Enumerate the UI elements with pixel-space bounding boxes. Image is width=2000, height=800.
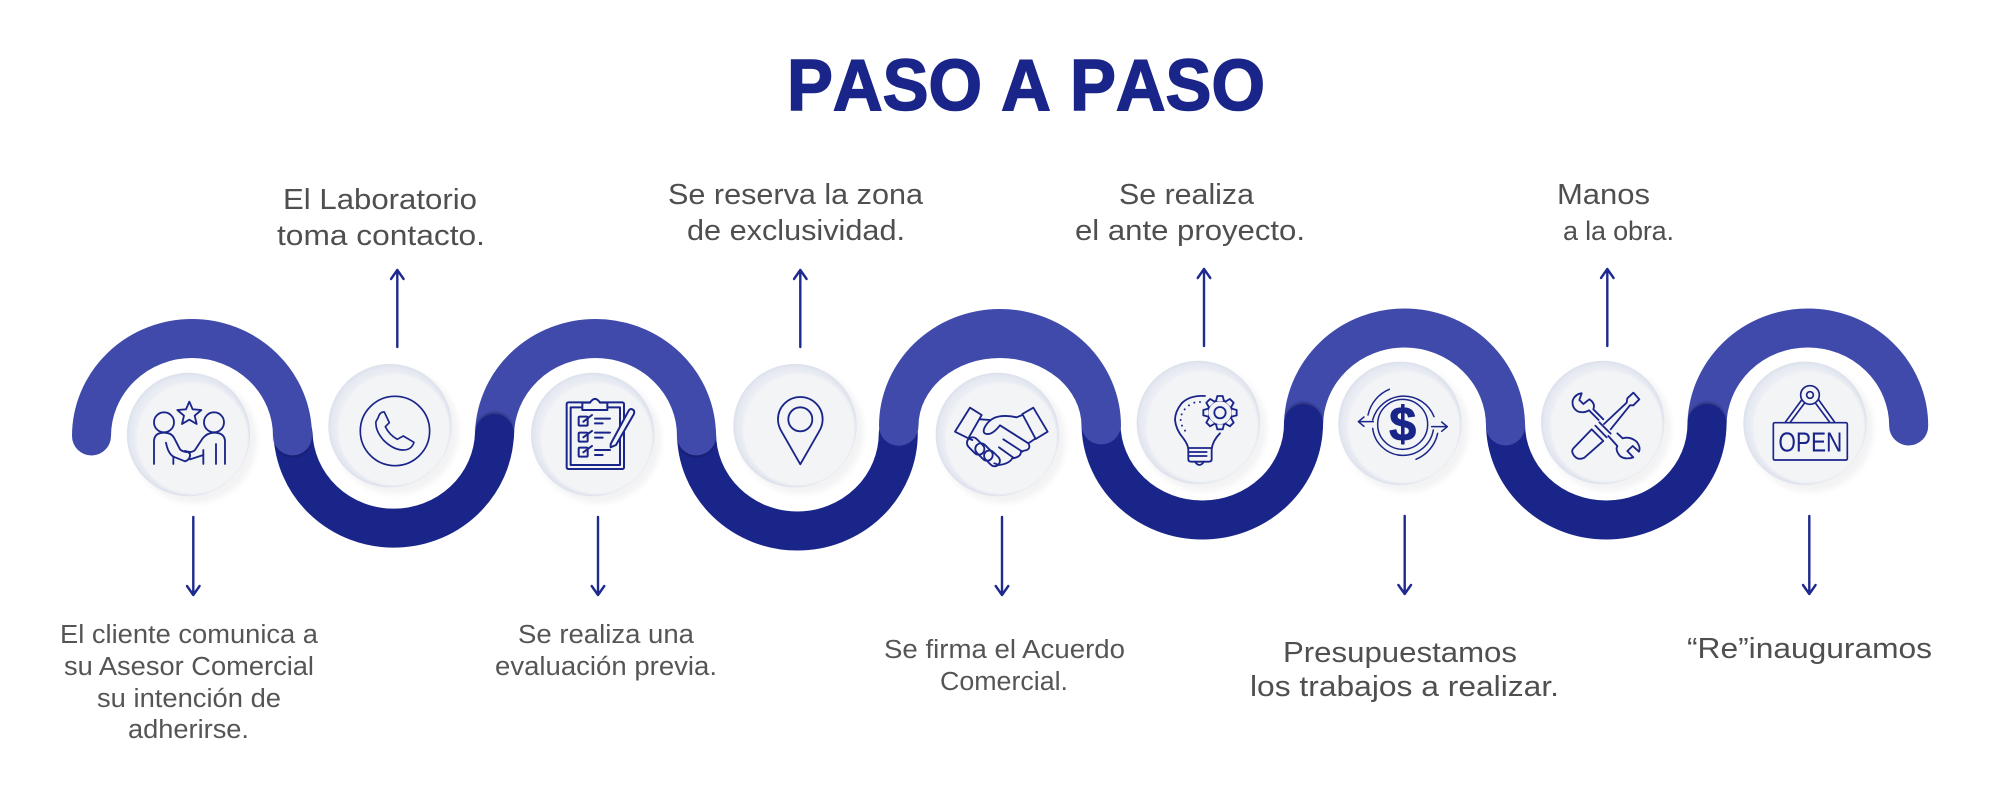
- step 6 button: [1137, 361, 1266, 491]
- text: step 8: [1557, 179, 1674, 246]
- icon: clipboard checklist: [567, 399, 634, 469]
- text: step 8: a la obra.: [1563, 216, 1674, 246]
- text: step 1: El cliente comunica a: [60, 621, 319, 649]
- text: step 4: [668, 179, 924, 247]
- text: step 1: su intención de: [97, 685, 281, 713]
- step 7 button: [1338, 362, 1468, 492]
- text: step 2: toma contacto.: [277, 220, 485, 252]
- text: step 6: [1075, 179, 1305, 247]
- text: step 6: el ante proyecto.: [1075, 215, 1305, 247]
- title: PASO A PASO: [787, 46, 1265, 126]
- text: step 1: [60, 621, 319, 744]
- icon: wrench and screwdriver: [1572, 393, 1640, 459]
- text: step 7: los trabajos a realizar.: [1250, 671, 1559, 703]
- step 2 button: [328, 364, 458, 494]
- text: step 1: adherirse.: [128, 716, 249, 744]
- arrow: step 3 down: [592, 517, 604, 595]
- text: step 7: Presupuestamos: [1283, 637, 1517, 669]
- step 8 button: [1541, 361, 1671, 491]
- icon: phone: [360, 396, 430, 466]
- arrow: step 5 down: [996, 517, 1008, 595]
- text: step 1: su Asesor Comercial: [64, 653, 314, 681]
- arrow: step 8 up: [1601, 269, 1614, 346]
- text: step 5: Comercial.: [940, 668, 1068, 696]
- text: step 2: [277, 184, 485, 252]
- step 9 button: [1743, 362, 1874, 492]
- icon: light bulb with gear: [1175, 396, 1237, 465]
- arrow: step 1 down: [187, 517, 200, 595]
- arrow: step 7 down: [1398, 516, 1411, 594]
- text: step 3: evaluación previa.: [495, 653, 717, 681]
- step 1 button: [127, 373, 257, 503]
- icon: handshake: [955, 408, 1048, 468]
- arrow: step 9 down: [1803, 516, 1816, 594]
- arrow: step 2 up: [391, 270, 404, 347]
- text: step 3: Se realiza una: [518, 621, 695, 649]
- text: step 3: [495, 621, 717, 681]
- arrow: step 6 up: [1198, 269, 1210, 346]
- text: step 2: El Laboratorio: [283, 184, 477, 216]
- arrow: step 4 up: [794, 270, 807, 347]
- text: step 4: de exclusividad.: [687, 215, 905, 247]
- text: step 4: Se reserva la zona: [668, 179, 924, 211]
- step 3 button: [531, 373, 661, 503]
- text: step 5: [884, 636, 1125, 696]
- text: step 8: Manos: [1557, 179, 1650, 211]
- text: step 6: Se realiza: [1119, 179, 1255, 211]
- text: step 5: Se firma el Acuerdo: [884, 636, 1125, 664]
- icon: people handshake with star: [154, 402, 225, 464]
- step 5 button: [936, 373, 1066, 503]
- wave path: [92, 309, 1909, 531]
- text: step 9: “Re”inauguramos: [1687, 633, 1932, 665]
- icon: location pin: [778, 397, 823, 464]
- icon: open sign: OPEN: [1778, 427, 1842, 458]
- step 4 button: [733, 364, 864, 494]
- icon: dollar with arrows: $: [1389, 398, 1416, 452]
- text: step 7: [1250, 637, 1559, 703]
